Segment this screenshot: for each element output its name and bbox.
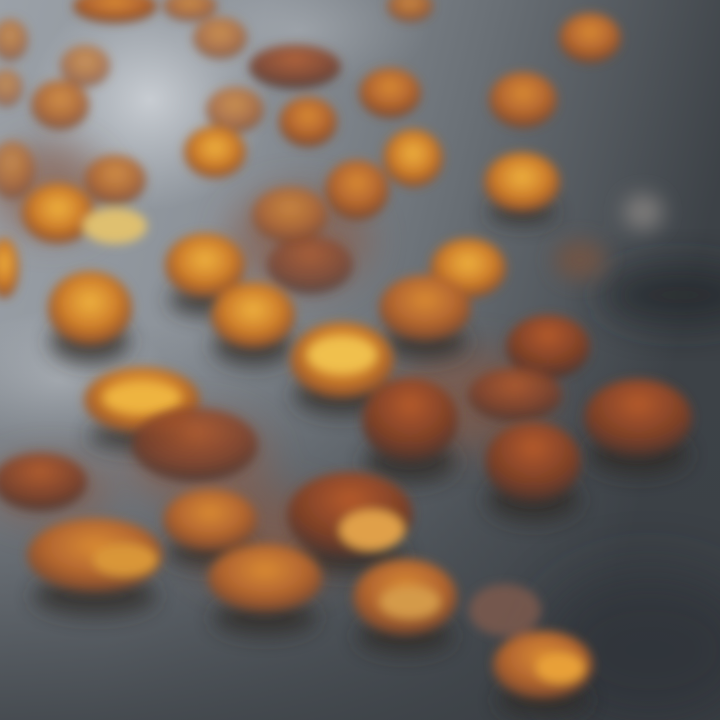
brown haze between clustered capsules (0, 145, 550, 590)
capsules: middle rows (0, 187, 692, 462)
capsule shadows (33, 200, 688, 716)
capsules: top rows (0, 0, 621, 244)
capsules: lower rows (0, 408, 593, 699)
capsules: dim pair on the right (554, 194, 663, 280)
